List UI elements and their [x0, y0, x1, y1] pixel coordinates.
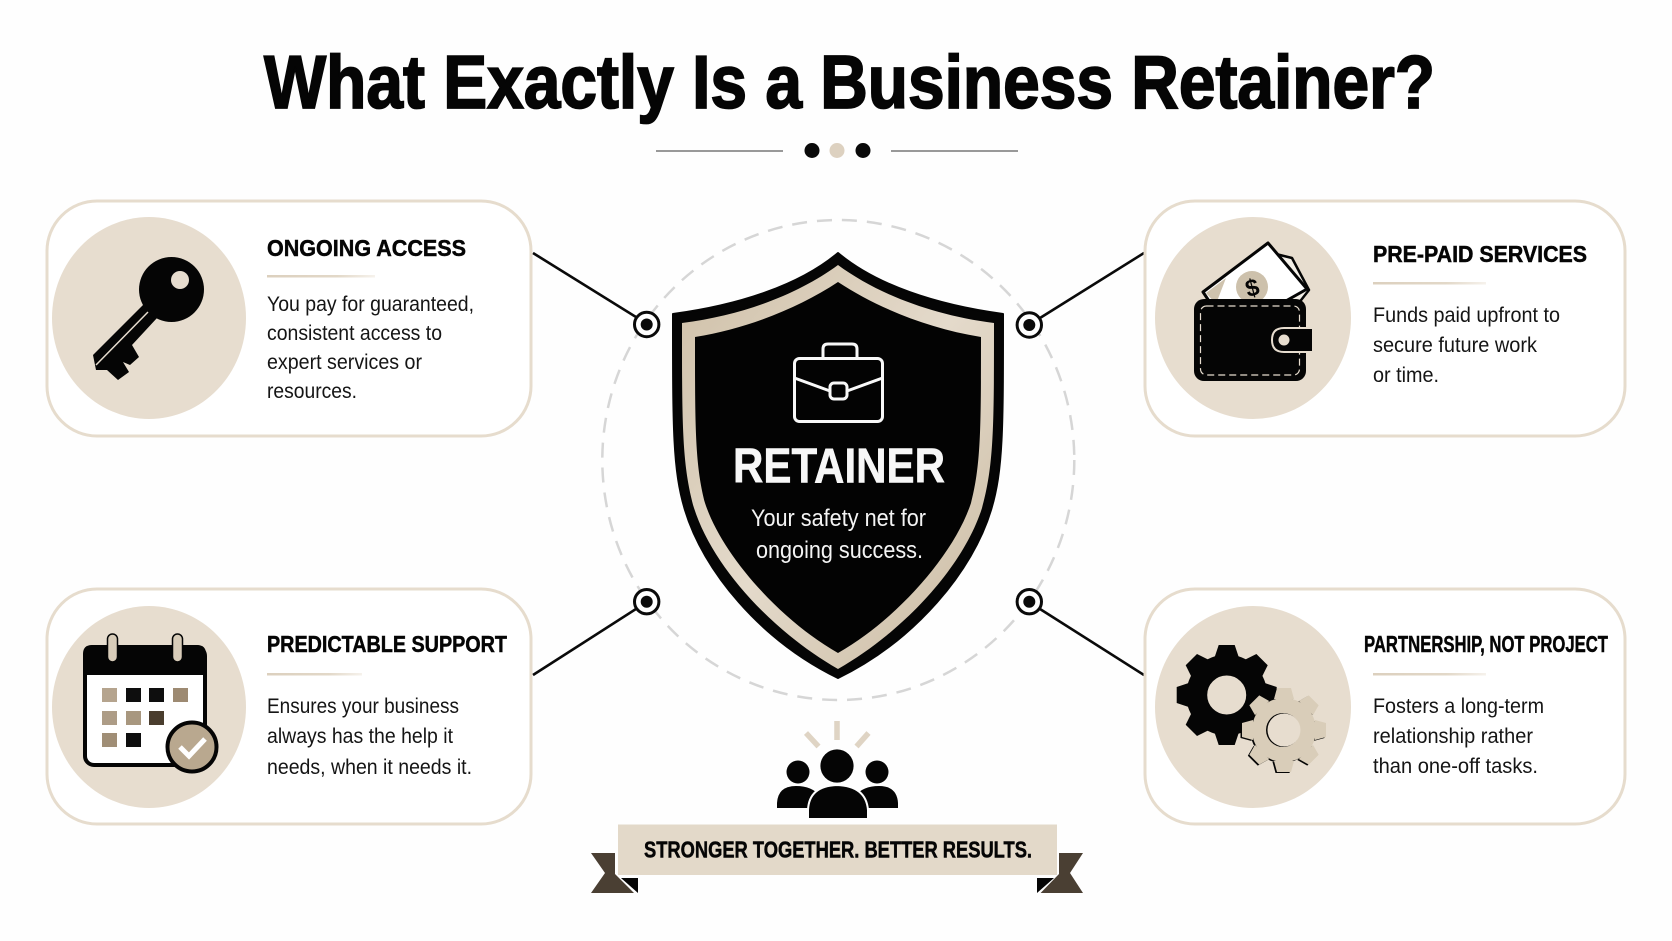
- panel: ongoing access: [47, 201, 531, 436]
- body text: Funds paid upfront to: [1373, 304, 1560, 327]
- body text: expert services or: [267, 351, 422, 374]
- dashed ring: [602, 220, 1074, 700]
- body text: [267, 695, 472, 779]
- body text: You pay for guaranteed,: [267, 293, 474, 316]
- shield tagline: Your safety net for: [751, 505, 926, 532]
- panel: pre-paid services: [1145, 201, 1625, 436]
- icon: key: [93, 257, 204, 380]
- shield tagline: [751, 505, 926, 564]
- body text: secure future work: [1373, 334, 1537, 357]
- icon: calendar with check: [83, 634, 216, 772]
- body text: Ensures your business: [267, 695, 459, 718]
- banner text: STRONGER TOGETHER. BETTER RESULTS.: [644, 836, 1032, 862]
- heading: PREDICTABLE SUPPORT: [267, 631, 508, 657]
- body text: relationship rather: [1373, 725, 1533, 748]
- body text: Fosters a long-term: [1373, 695, 1544, 718]
- banner: [591, 824, 1083, 893]
- heading: PRE-PAID SERVICES: [1373, 241, 1587, 267]
- icon: gears: [1177, 645, 1326, 773]
- body text: [267, 293, 474, 403]
- title: What Exactly Is a Business Retainer?: [264, 40, 1435, 124]
- body text: [1373, 304, 1560, 387]
- shield tagline: ongoing success.: [756, 537, 923, 564]
- shield label: RETAINER: [733, 440, 945, 494]
- body text: than one-off tasks.: [1373, 755, 1538, 778]
- icon: wallet with cash: $: [1242, 274, 1263, 303]
- central shield: [673, 253, 1003, 678]
- panel: predictable support: [47, 589, 531, 824]
- body text: resources.: [267, 380, 357, 403]
- icon: briefcase: [794, 344, 882, 422]
- connector lines and nodes: [533, 253, 1144, 675]
- body text: or time.: [1373, 364, 1439, 387]
- body text: [1373, 695, 1544, 778]
- title divider: [656, 143, 1018, 158]
- body text: needs, when it needs it.: [267, 756, 472, 779]
- body text: always has the help it: [267, 725, 453, 748]
- icon: team of people: [777, 721, 898, 819]
- icon: wallet with cash: [1194, 243, 1313, 381]
- panel: partnership, not project: [1145, 589, 1625, 824]
- heading: ONGOING ACCESS: [267, 235, 466, 261]
- body text: consistent access to: [267, 322, 442, 345]
